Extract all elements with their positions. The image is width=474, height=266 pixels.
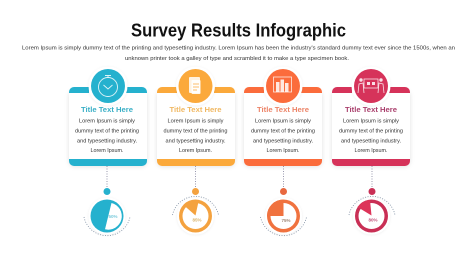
card text 4: dummy text of the printing xyxy=(339,128,403,134)
card text 2: Lorem Ipsum. xyxy=(179,148,212,154)
card text 2 xyxy=(164,119,228,154)
panel: card 1 xyxy=(69,66,147,166)
chart: 50% pie: 50% xyxy=(108,214,118,219)
chart: 75% pie xyxy=(260,166,306,236)
card text 3: dummy text of the printing xyxy=(251,128,315,134)
card title 1: Title Text Here xyxy=(81,105,133,114)
title: Survey Results Infographic xyxy=(131,20,346,40)
card title 4: Title Text Here xyxy=(345,105,397,114)
panel: card 2 xyxy=(157,66,235,166)
bottom bar 3 xyxy=(244,159,322,166)
chart: 85% pie xyxy=(172,166,218,234)
icon: document xyxy=(176,66,215,106)
top bar 4 xyxy=(332,87,410,93)
panel: card 3 xyxy=(244,66,322,166)
card text 1: Lorem Ipsum. xyxy=(90,148,124,154)
icon: stopwatch xyxy=(88,66,128,106)
chart: 75% pie: 75% xyxy=(281,218,291,223)
card text 3: Lorem Ipsum is simply xyxy=(255,119,311,125)
bottom bar 1 xyxy=(69,159,147,166)
card text 3: Lorem Ipsum. xyxy=(266,148,300,154)
chart: 80% pie xyxy=(349,166,395,234)
chart: 80% pie: 80% xyxy=(368,218,378,222)
top bar 2 xyxy=(157,87,235,93)
card text 1: Lorem Ipsum is simply xyxy=(79,119,135,125)
card title 3: Title Text Here xyxy=(257,105,309,114)
panel: card 4 xyxy=(332,66,410,166)
bottom bar 4 xyxy=(332,159,410,166)
top bar 1 xyxy=(69,87,147,93)
chart: 50% pie xyxy=(84,166,130,236)
card text 4 xyxy=(339,119,403,154)
card text 3: and typesetting industry. xyxy=(253,138,313,144)
card text 2: Lorem Ipsum is simply xyxy=(168,119,224,125)
card text 1: dummy text of the printing xyxy=(75,128,139,134)
card text 3 xyxy=(251,119,315,154)
card text 4: Lorem Ipsum. xyxy=(354,148,388,154)
card text 4: Lorem Ipsum is simply xyxy=(343,119,399,125)
icon: presenters at a board xyxy=(352,66,390,106)
icon: bar chart xyxy=(264,66,302,106)
card text 1 xyxy=(75,119,139,154)
intro paragraph: unknown printer took a galley of type and scrambled it to make a type specimen book. xyxy=(125,56,349,62)
card text 2: and typesetting industry. xyxy=(166,138,226,144)
top bar 3 xyxy=(244,87,322,93)
card title 2: Title Text Here xyxy=(170,105,222,114)
bottom bar 2 xyxy=(157,159,235,166)
card text 4: and typesetting industry. xyxy=(341,138,401,144)
card text 1: and typesetting industry. xyxy=(77,138,137,144)
intro paragraph xyxy=(22,46,455,62)
chart: 85% pie: 85% xyxy=(192,218,202,222)
intro paragraph: Lorem Ipsum is simply dummy text of the printing and typesetting industry. Lorem Ipsum has been the industry's standard dummy text ever since the 1500s, when an xyxy=(22,46,455,52)
card text 2: dummy text of the printing xyxy=(164,128,228,134)
